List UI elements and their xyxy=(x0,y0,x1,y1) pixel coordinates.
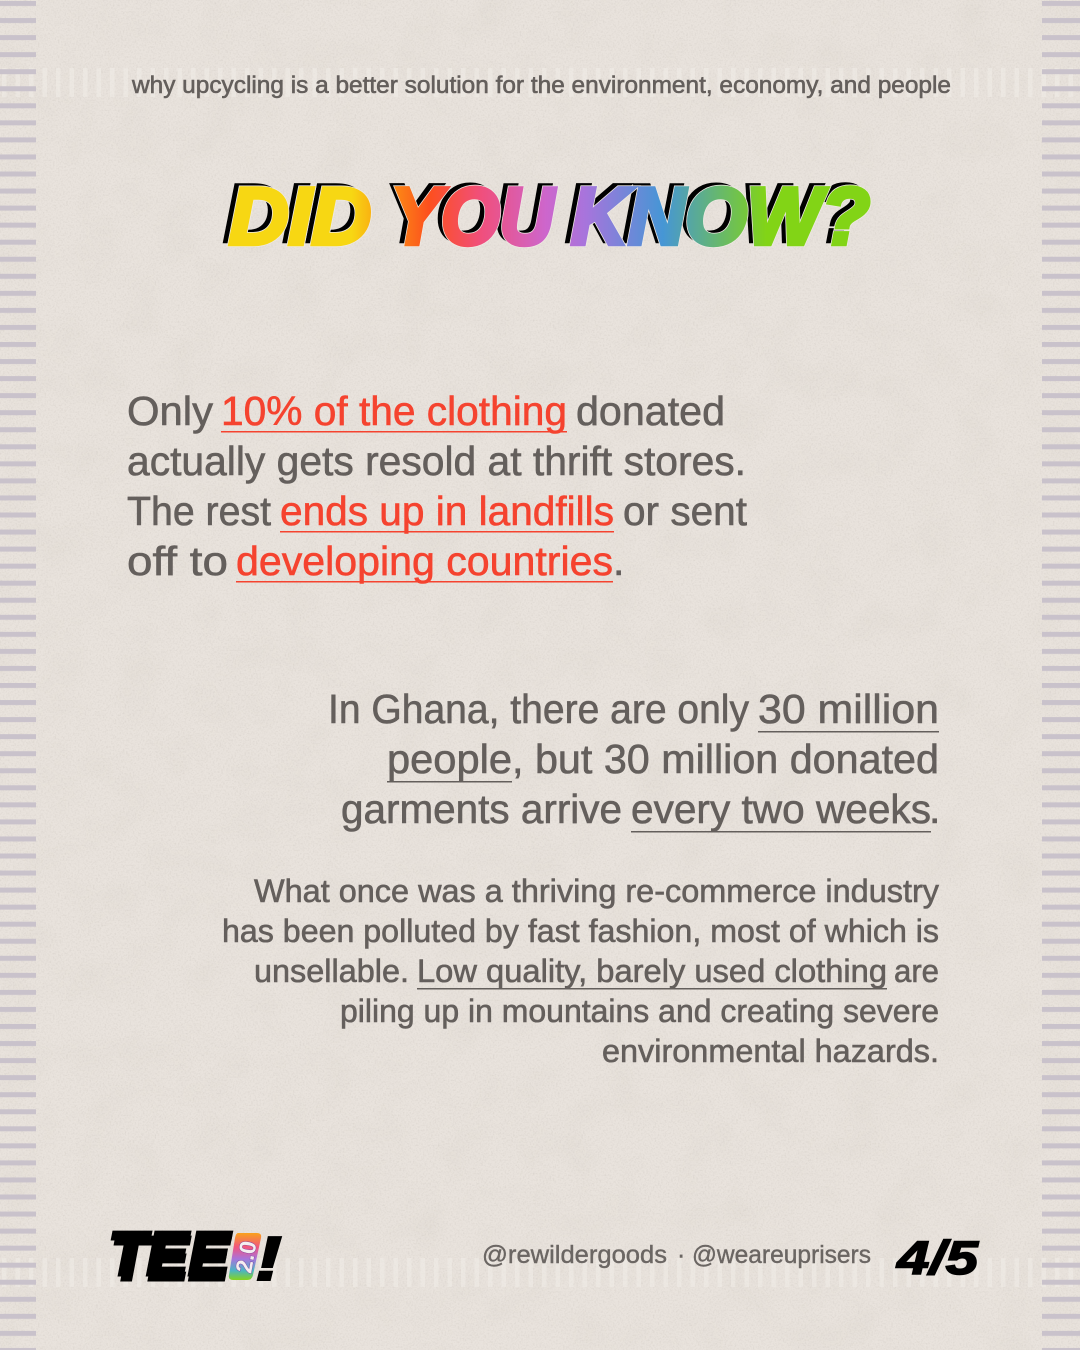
text block: clothing statistic: developing countries xyxy=(236,538,613,584)
text block: clothing statistic: off to xyxy=(127,538,228,584)
title: did you know: YOU xyxy=(391,172,556,262)
text block: clothing statistic: The rest xyxy=(127,488,272,534)
text block: ghana statistic: In Ghana, there are only xyxy=(328,686,749,732)
title: did you know: DID xyxy=(229,172,371,262)
logo: tee 2.0: TEE xyxy=(108,1220,232,1289)
subtitle: why upcycling is a better solution for the environment, economy, and people xyxy=(131,72,951,99)
text block: fast fashion explanation: What once was a thriving re-commerce industry xyxy=(254,873,939,909)
text block: ghana statistic: 30 million xyxy=(758,686,939,732)
text block: ghana statistic: . xyxy=(929,786,940,832)
text block: fast fashion explanation: environmental hazards. xyxy=(602,1033,939,1069)
title: did you know: YOU xyxy=(386,169,551,259)
social handles: @rewildergoods xyxy=(482,1241,667,1269)
text block: clothing statistic: 10% of the clothing xyxy=(221,388,567,434)
title: did you know: KNOW? xyxy=(566,169,865,259)
text block: clothing statistic: Only xyxy=(127,388,213,434)
text block: fast fashion explanation: are xyxy=(894,953,939,989)
text block: ghana statistic: garments arrive xyxy=(341,786,622,832)
title: did you know xyxy=(224,169,870,262)
text block: clothing statistic xyxy=(127,388,748,584)
page number: 4/5 xyxy=(896,1231,979,1284)
logo: tee 2.0: ! xyxy=(255,1225,282,1294)
title: did you know: DID xyxy=(224,169,366,259)
logo: tee 2.0 xyxy=(108,1220,282,1294)
social handles: · xyxy=(677,1241,685,1269)
text block: ghana statistic: people xyxy=(387,736,512,782)
social handles: @weareuprisers xyxy=(692,1241,871,1269)
text block: clothing statistic: . xyxy=(613,538,624,584)
title: did you know: DID xyxy=(229,172,371,262)
text block: clothing statistic: donated xyxy=(576,388,725,434)
text block: fast fashion explanation xyxy=(222,873,939,1069)
text block: clothing statistic: ends up in landfills xyxy=(280,488,614,534)
text block: ghana statistic: every two weeks xyxy=(631,786,931,832)
social handles xyxy=(482,1241,871,1269)
text block: ghana statistic: , but 30 million donated xyxy=(512,736,939,782)
title: did you know: KNOW? xyxy=(571,172,870,262)
text block: fast fashion explanation: piling up in mountains and creating severe xyxy=(340,993,939,1029)
text block: fast fashion explanation: Low quality, barely used clothing xyxy=(417,953,887,989)
title: did you know: KNOW? xyxy=(571,172,870,262)
text block: clothing statistic: actually gets resold at thrift stores. xyxy=(127,438,746,484)
text block: fast fashion explanation: has been polluted by fast fashion, most of which is xyxy=(222,913,939,949)
text block: clothing statistic: or sent xyxy=(623,488,748,534)
title: did you know: YOU xyxy=(391,172,556,262)
logo: tee 2.0: TEE xyxy=(111,1225,231,1294)
icon: rainbow 2.0 badge: 2.0 xyxy=(230,1239,261,1275)
text block: fast fashion explanation: unsellable. xyxy=(254,953,409,989)
text block: ghana statistic xyxy=(328,686,940,832)
